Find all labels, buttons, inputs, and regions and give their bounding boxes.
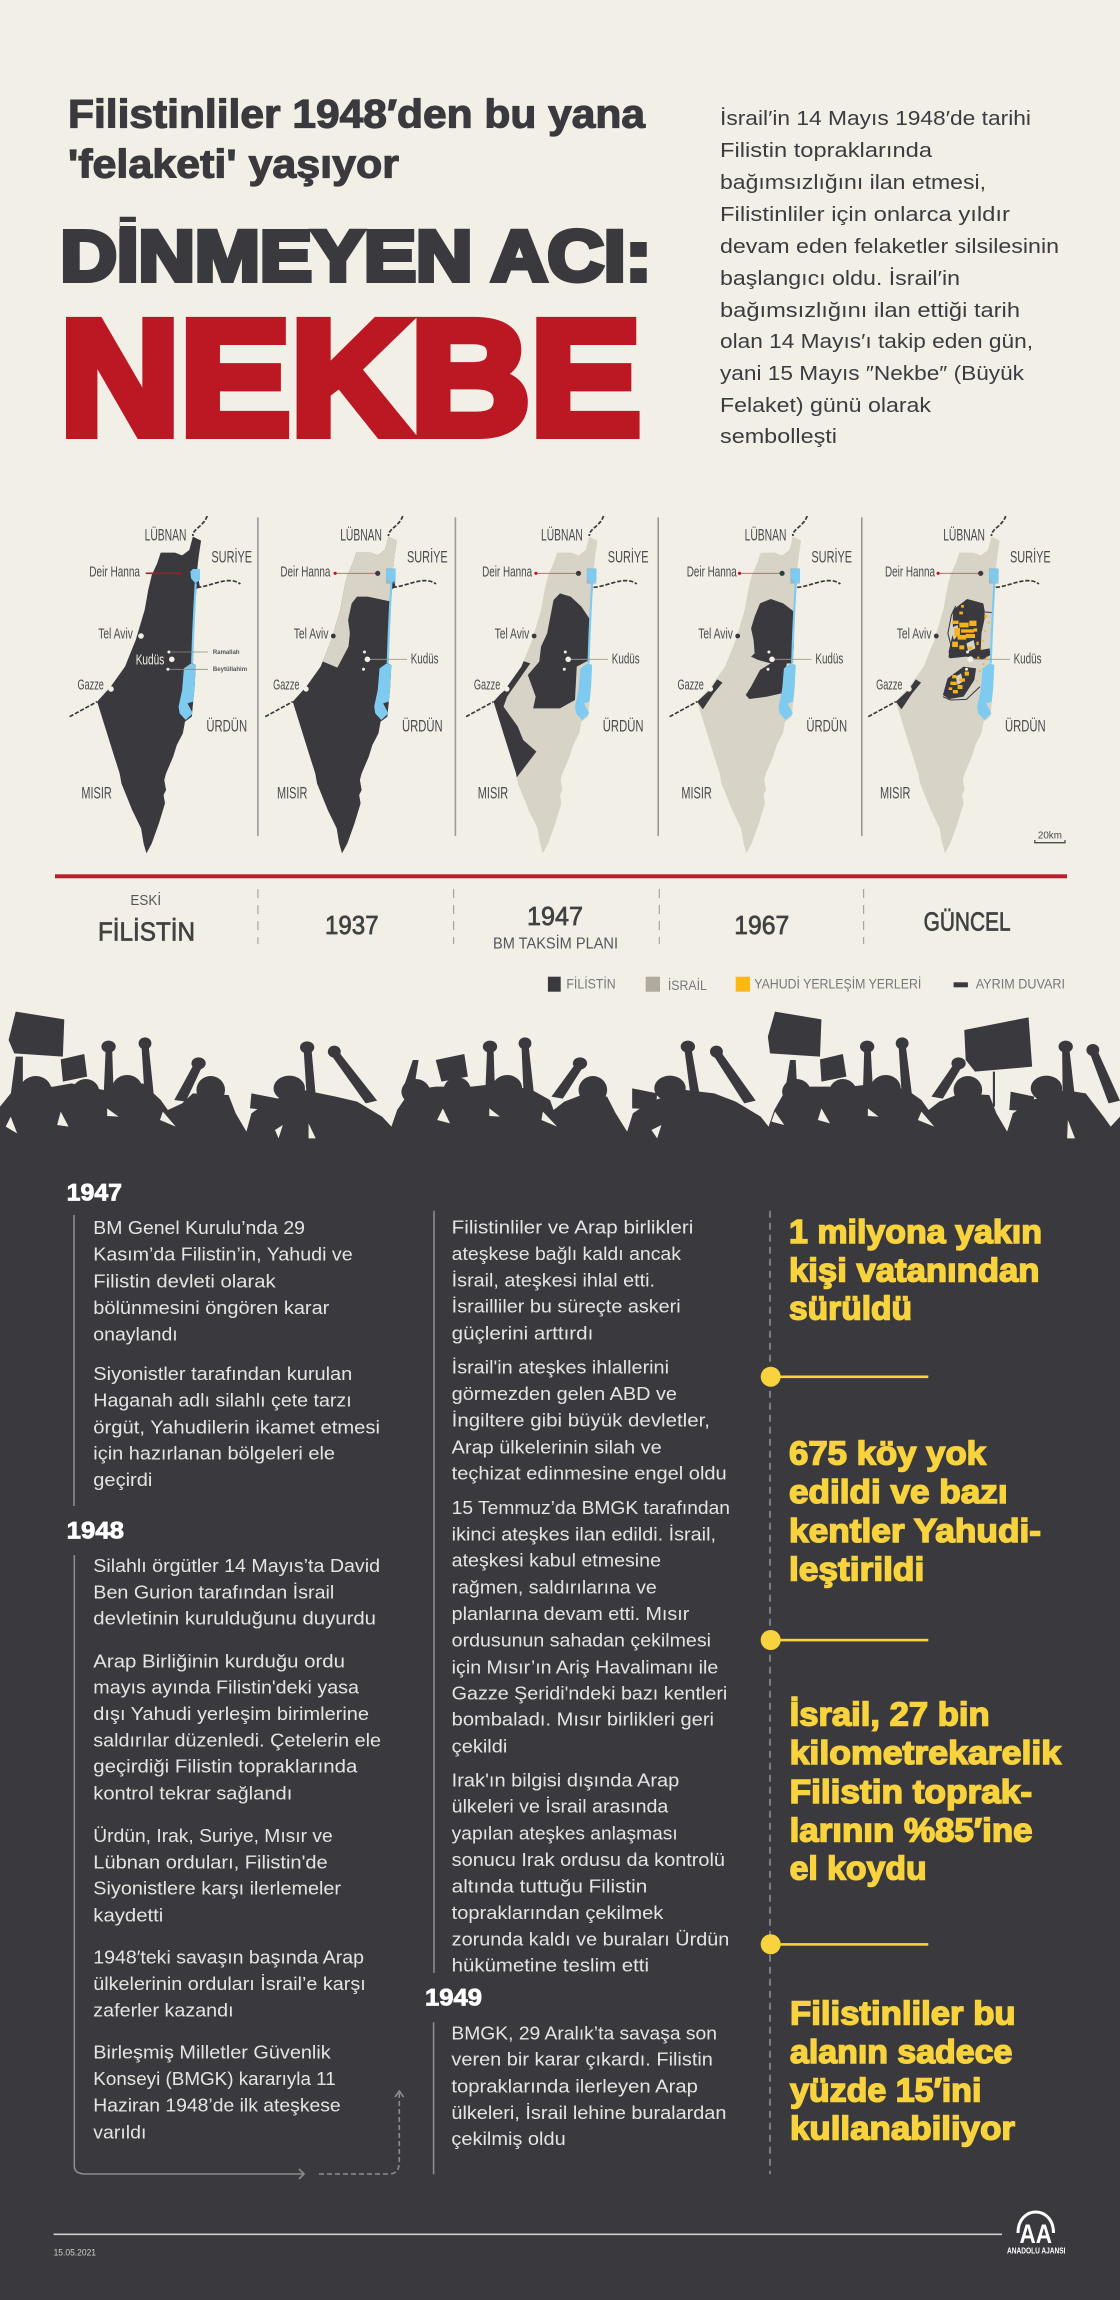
- intro paragraph: Felaket) günü olarak: [720, 395, 932, 417]
- text block: 1948: Birleşmiş Milletler Güvenlik: [93, 2041, 332, 2062]
- heading: 1948: 1948: [67, 1517, 124, 1544]
- text block: 1947: Filistin devleti olarak: [93, 1270, 277, 1291]
- text block: 1948 continued: ateşkese bağlı kaldı ancak: [452, 1243, 682, 1264]
- text block: 1948: [93, 1555, 381, 2142]
- text block: 1948 continued: Arap ülkelerinin silah ve: [452, 1436, 662, 1457]
- map: 1967: Tel Aviv: [698, 626, 733, 642]
- callout: 1 milyon: [789, 1213, 1042, 1327]
- intro paragraph: başlangıcı oldu. İsrail′in: [720, 267, 960, 290]
- map: 1967: ÜRDÜN: [806, 718, 847, 736]
- text block: 1949: veren bir karar çıkardı. Filistin: [451, 2049, 713, 2070]
- intro paragraph: [720, 107, 1059, 448]
- map: eski Filistin: [70, 516, 252, 853]
- map: 1947 partition plan: [466, 516, 648, 853]
- text block: 1948 continued: altında tuttuğu Filistin: [452, 1875, 647, 1896]
- title: Dinmeyen Acı: DİNMEYEN ACI:: [60, 218, 652, 296]
- map: 1947 partition plan: LÜBNAN: [541, 527, 583, 545]
- map: 1967: Gazze: [678, 677, 704, 693]
- callout: 675 köy: [789, 1435, 1041, 1587]
- callout: 27 bin: Filistin toprak-: [790, 1773, 1032, 1810]
- text block: 1949: ülkeleri, İsrail lehine buralardan: [451, 2102, 726, 2123]
- map: eski Filistin: Deir Hanna: [89, 565, 141, 581]
- crowd silhouette: [0, 1012, 1120, 1140]
- tab: 1947: [493, 901, 618, 952]
- map: 1937: Deir Hanna: [280, 565, 331, 581]
- text block: 1948: Arap Birliğinin kurduğu ordu: [93, 1650, 345, 1671]
- legend: AYRIM DUVARI: [976, 976, 1065, 991]
- text block: 1947: Siyonistler tarafından kurulan: [93, 1363, 352, 1384]
- dark lower panel: [0, 1135, 1120, 2300]
- legend: YAHUDİ YERLEŞİM YERLERİ: [754, 976, 921, 991]
- callout: 675 köy: leştirildi: [789, 1550, 924, 1587]
- text block: 1947: Haganah adlı silahlı çete tarzı: [93, 1390, 352, 1411]
- text block: 1948 continued: güçlerini arttırdı: [452, 1322, 593, 1343]
- tab: 1947: BM TAKSİM PLANI: [493, 933, 618, 952]
- tab: 1967: 1967: [734, 910, 789, 940]
- text block: 1947: bölünmesini öngören karar: [93, 1297, 329, 1318]
- text block: 1948: 1948′teki savaşın başında Arap: [93, 1946, 364, 1967]
- callout: 1 milyon: kişi vatanından: [789, 1251, 1040, 1288]
- logo: Anadolu Ajansı: AA: [1020, 2219, 1052, 2249]
- scale bar: 20km: 20km: [1038, 831, 1062, 842]
- map: 1967: Kudüs: [815, 651, 843, 667]
- map: eski Filistin: Beytüllahim: [213, 666, 247, 673]
- intro paragraph: devam eden felaketler silsilesinin: [720, 236, 1059, 258]
- text block: 1948 continued: bombaladı. Mısır birlikleri geri: [452, 1709, 714, 1730]
- text block: 1948 continued: zorunda kaldı ve buraları Ürdün: [452, 1928, 729, 1949]
- text block: 1948 continued: Gazze Şeridi'ndeki bazı kentleri: [452, 1682, 727, 1703]
- text block: 1948 continued: topraklarından çekilmek: [452, 1902, 664, 1923]
- intro paragraph: sembolleşti: [720, 426, 837, 448]
- text block: 1948 continued: İsrailliler bu süreçte askeri: [452, 1296, 681, 1317]
- map: eski Filistin: LÜBNAN: [145, 527, 186, 545]
- map: 1967: LÜBNAN: [745, 527, 786, 545]
- text block: 1948 continued: teçhizat edinmesine engel oldu: [452, 1462, 727, 1483]
- map: 1947 partition plan: Kudüs: [612, 651, 640, 667]
- map: güncel: [868, 516, 1051, 853]
- subtitle: Filistinliler 1948′den bu yana: [68, 92, 646, 136]
- intro paragraph: İsrail′in 14 Mayıs 1948′de tarihi: [720, 107, 1031, 130]
- text block: 1948: zaferler kazandı: [93, 2000, 234, 2021]
- tab: eski Filistin: FİLİSTİN: [98, 917, 195, 947]
- text block: 1947: BM Genel Kurulu’nda 29: [93, 1217, 305, 1238]
- text block: 1948: ülkelerinin orduları İsrail’e karşı: [93, 1973, 366, 1994]
- text block: 1948: Silahlı örgütler 14 Mayıs’ta David: [93, 1555, 380, 1576]
- map: güncel: MISIR: [880, 784, 910, 802]
- text block: 1948: Konseyi (BMGK) kararıyla 11: [93, 2068, 336, 2089]
- callout: yüzde 15: kullanabiliyor: [790, 2110, 1015, 2147]
- map: güncel: ÜRDÜN: [1005, 718, 1046, 736]
- text block: 1948 continued: İngiltere gibi büyük devletler,: [452, 1410, 710, 1431]
- map: 1937: LÜBNAN: [340, 527, 382, 545]
- map: eski Filistin: Ramallah: [213, 649, 240, 656]
- text block: 1948: geçirdiği Filistin topraklarında: [93, 1756, 358, 1777]
- map: 1937: Tel Aviv: [294, 626, 329, 642]
- text block: 1949: çekilmiş oldu: [451, 2128, 566, 2149]
- callout: 1 milyon: 1 milyona yakın: [789, 1213, 1042, 1250]
- callout: 1 milyon: sürüldü: [789, 1290, 912, 1327]
- marker: [761, 1367, 928, 1387]
- logo: Anadolu Ajansı: [1007, 2212, 1066, 2255]
- tab: 1937: 1937: [325, 910, 379, 940]
- heading: 1949: 1949: [425, 1985, 482, 2012]
- map: 1947 partition plan: Deir Hanna: [482, 565, 533, 581]
- text block: 1948 continued: hükümetine teslim etti: [452, 1955, 649, 1976]
- map: 1937: [265, 516, 448, 853]
- map: 1937: MISIR: [277, 784, 307, 802]
- text block: 1947: örgüt, Yahudilerin ikamet etmesi: [93, 1416, 380, 1437]
- map: 1947 partition plan: MISIR: [478, 784, 508, 802]
- map: güncel: SURİYE: [1010, 548, 1051, 567]
- callout: yüzde 15: Filistinliler bu: [790, 1995, 1016, 2032]
- heading: 1947: 1947: [67, 1180, 122, 1207]
- intro paragraph: yani 15 Mayıs ″Nekbe″ (Büyük: [720, 363, 1025, 385]
- text block: 1948 continued: ikinci ateşkes ilan edildi. İsrail,: [452, 1524, 716, 1545]
- text block: 1948: varıldı: [93, 2121, 146, 2142]
- text block: 1948 continued: çekildi: [452, 1735, 507, 1756]
- text block: 1948 continued: planlarına devam etti. Mısır: [452, 1603, 689, 1624]
- map: güncel: Tel Aviv: [897, 626, 932, 642]
- callout: 675 köy: edildi ve bazı: [789, 1473, 1008, 1510]
- text block: 1948 continued: Irak'ın bilgisi dışında Arap: [452, 1770, 679, 1791]
- text block: 1948 continued: Filistinliler ve Arap birlikleri: [452, 1216, 693, 1237]
- marker: [761, 1934, 928, 1954]
- text block: 1948: kaydetti: [93, 1905, 163, 1926]
- red rule: [55, 874, 1067, 878]
- text block: 1947: onaylandı: [93, 1323, 178, 1344]
- callout: 27 bin: [790, 1696, 1062, 1887]
- map: güncel: Kudüs: [1014, 651, 1041, 667]
- map: 1967: MISIR: [681, 784, 712, 802]
- text block: 1948: kontrol tekrar sağlandı: [93, 1782, 292, 1803]
- map: 1937: SURİYE: [407, 548, 448, 567]
- text block: 1948 continued: İsrail, ateşkesi ihlal etti.: [452, 1270, 655, 1291]
- subtitle: [68, 92, 646, 186]
- date: 15.05.2021: [54, 2248, 96, 2259]
- map: 1967: [670, 516, 852, 853]
- text block: 1948 continued: İsrail'in ateşkes ihlallerini: [452, 1356, 669, 1377]
- intro paragraph: Filistinliler için onlarca yıldır: [720, 204, 1010, 226]
- text block: 1948 continued: ateşkesi kabul etmesine: [452, 1550, 661, 1571]
- callout: 27 bin: el koydu: [790, 1850, 927, 1887]
- text block: 1948 continued: ülkeleri ve İsrail arasında: [452, 1796, 669, 1817]
- text block: 1948: Haziran 1948’de ilk ateşkese: [93, 2095, 341, 2116]
- logo: Anadolu Ajansı: ANADOLU AJANSI: [1007, 2246, 1066, 2255]
- text block: 1948 continued: ordusunun sahadan çekilmesi: [452, 1630, 711, 1651]
- callout: yüzde 15: yüzde 15′ini: [790, 2071, 981, 2108]
- map: güncel: Gazze: [876, 677, 902, 693]
- text block: 1948: Ürdün, Irak, Suriye, Mısır ve: [93, 1825, 333, 1846]
- text block: 1949: BMGK, 29 Aralık’ta savaşa son: [451, 2022, 717, 2043]
- map: güncel: LÜBNAN: [943, 527, 985, 545]
- intro paragraph: bağımsızlığını ilan etmesi,: [720, 172, 986, 194]
- text block: 1947: [93, 1217, 380, 1490]
- text block: 1948 continued: sonucu Irak ordusu da kontrolü: [452, 1849, 725, 1870]
- intro paragraph: Filistin topraklarında: [720, 140, 933, 162]
- subtitle: 'felaketi' yaşıyor: [68, 142, 399, 186]
- text block: 1948: Siyonistlere karşı ilerlemeler: [93, 1878, 341, 1899]
- text block: 1949: topraklarında ilerleyen Arap: [451, 2075, 698, 2096]
- marker: [761, 1630, 928, 1650]
- map: 1967: Deir Hanna: [687, 565, 737, 581]
- text block: 1948 continued: yapılan ateşkes anlaşması: [452, 1822, 678, 1843]
- map: eski Filistin: MISIR: [81, 784, 112, 802]
- text block: 1949: [451, 2022, 726, 2149]
- callout: yüzde 15: [790, 1995, 1016, 2147]
- intro paragraph: olan 14 Mayıs′ı takip eden gün,: [720, 331, 1033, 353]
- callout: 675 köy: kentler Yahudi-: [789, 1512, 1041, 1549]
- tab: eski Filistin: [98, 891, 195, 947]
- text block: 1948: dışı Yahudi yerleşim birimlerine: [93, 1703, 369, 1724]
- callout: yüzde 15: alanın sadece: [790, 2033, 1012, 2070]
- callout: 27 bin: larının %85′ine: [790, 1811, 1033, 1848]
- map: 1967: SURİYE: [811, 548, 852, 567]
- text block: 1947: geçirdi: [93, 1469, 152, 1490]
- map: eski Filistin: Kudüs: [136, 652, 164, 668]
- text block: 1948: Lübnan orduları, Filistin'de: [93, 1851, 328, 1872]
- intro paragraph: bağımsızlığını ilan ettiği tarih: [720, 300, 1020, 322]
- map: 1937: Kudüs: [411, 651, 439, 667]
- legend: İSRAİL: [668, 978, 707, 993]
- map: 1947 partition plan: SURİYE: [608, 548, 648, 567]
- map: 1937: Gazze: [273, 677, 300, 693]
- title: Nekbe: NEKBE: [60, 286, 641, 469]
- legend: [548, 976, 1065, 993]
- tab: eski Filistin: ESKİ: [130, 891, 161, 909]
- legend: FİLİSTİN: [566, 976, 616, 991]
- text block: 1948 continued: görmezden gelen ABD ve: [452, 1383, 677, 1404]
- map: eski Filistin: SURİYE: [211, 548, 252, 567]
- callout: 675 köy: 675 köy yok: [789, 1435, 987, 1472]
- text block: 1948: saldırılar düzenledi. Çetelerin ele: [93, 1729, 381, 1750]
- map: eski Filistin: Gazze: [78, 677, 104, 693]
- callout: 27 bin: kilometrekarelik: [790, 1734, 1062, 1771]
- callout: 27 bin: İsrail, 27 bin: [790, 1696, 990, 1733]
- text block: 1948 continued: 15 Temmuz’da BMGK tarafından: [452, 1497, 730, 1518]
- map: güncel: Deir Hanna: [885, 565, 936, 581]
- text block: 1948 continued: [452, 1216, 730, 1976]
- arrow: continuation to next column: [74, 1555, 404, 2179]
- tab: güncel: GÜNCEL: [924, 907, 1011, 937]
- map: 1947 partition plan: Gazze: [474, 677, 500, 693]
- map: eski Filistin: Tel Aviv: [98, 626, 133, 642]
- text block: 1948 continued: rağmen, saldırılarına ve: [452, 1576, 657, 1598]
- text block: 1948: Ben Gurion tarafından İsrail: [93, 1581, 334, 1602]
- text block: 1948: mayıs ayında Filistin'deki yasa: [93, 1676, 360, 1697]
- text block: 1947: için hazırlanan bölgeleri ele: [93, 1442, 335, 1463]
- map: eski Filistin: ÜRDÜN: [206, 718, 247, 736]
- tab: 1947: 1947: [527, 901, 583, 931]
- text block: 1948: devletinin kurulduğunu duyurdu: [93, 1607, 376, 1628]
- map: 1947 partition plan: ÜRDÜN: [603, 718, 643, 736]
- text block: 1948 continued: için Mısır’ın Ariş Havalimanı ile: [452, 1656, 718, 1677]
- map: 1947 partition plan: Tel Aviv: [495, 626, 530, 642]
- text block: 1947: Kasım’da Filistin’in, Yahudi ve: [93, 1244, 353, 1265]
- map: 1937: ÜRDÜN: [402, 718, 443, 736]
